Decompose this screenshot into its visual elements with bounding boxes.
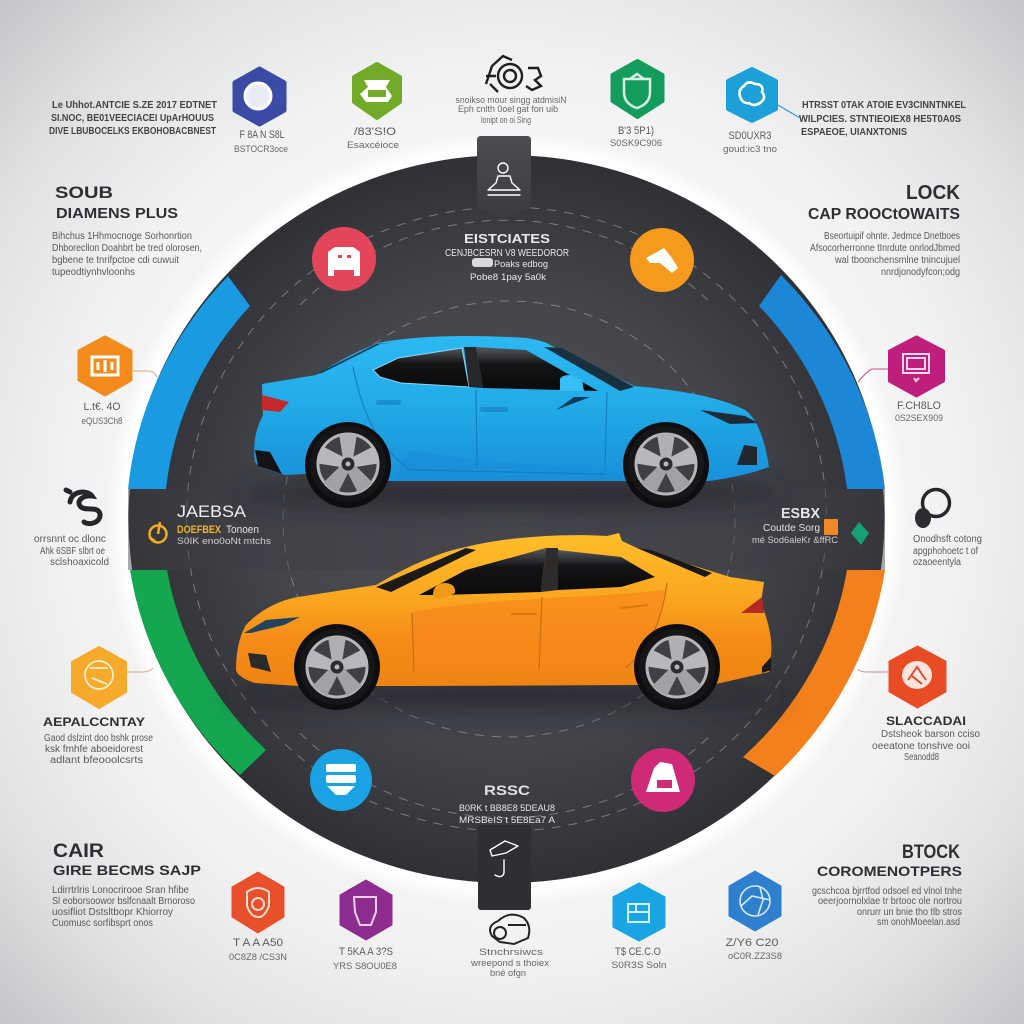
rear window — [373, 348, 469, 387]
text: Dstsheok barson cciso — [881, 729, 980, 740]
disc body — [128, 155, 884, 883]
disc right label: mé Sod6aleKr &ffRC — [752, 535, 838, 546]
centre top text: Poaks edbog — [494, 259, 548, 270]
top left text block: Le Uhhot.ANTCIE S.ZE 2017 EDTNET — [52, 100, 217, 111]
bottom right heading block: sm onohMoeelan.asd — [877, 917, 960, 928]
icon: luggage — [328, 247, 360, 276]
left middle text — [34, 534, 109, 568]
windshield strip — [544, 347, 634, 391]
car: blue — [254, 336, 769, 508]
icon: helmet — [245, 83, 271, 109]
caption: T$ CE.C.O — [615, 946, 661, 958]
caption: Z/Y6 C20 — [726, 937, 778, 949]
centre bottom text: B0RK t BB8E8 5DEAU8 — [459, 803, 555, 814]
black icon: left wave — [66, 490, 100, 524]
taillight — [262, 395, 289, 412]
icon: orange square — [824, 519, 838, 535]
caption: B'3 5P1) — [618, 125, 654, 137]
caption: SD0UXR3 — [728, 130, 772, 142]
caption: F.CH8LO — [897, 400, 941, 412]
rear wheel — [639, 629, 715, 705]
dashed orbit outer — [186, 207, 826, 831]
connector — [127, 668, 153, 672]
pillar — [541, 548, 558, 592]
top right text block: HTRSST 0TAK ATOIE EV3CINNTNKEL — [802, 100, 966, 111]
sub caption: YRS S8OU0E8 — [333, 961, 397, 972]
sub caption: S0SK9C906 — [610, 138, 662, 149]
top right text block — [799, 100, 966, 138]
icon: bottle — [354, 897, 376, 925]
top left text block — [49, 100, 217, 137]
hex: yellow left — [43, 647, 153, 766]
centre top text: Pobe8 1pay 5a0k — [470, 272, 546, 283]
right middle text: ozaoeentyla — [913, 557, 961, 568]
disc right label: ESBX — [781, 505, 820, 522]
circle badge: red — [312, 227, 376, 291]
hex: red right: Seanodd8 — [904, 752, 939, 763]
black icon: right ring — [915, 490, 950, 528]
bottom left heading block: Sl eoborsoowor bslfcnaalt Brnoroso — [52, 896, 195, 907]
hex: blue bottom — [726, 871, 782, 962]
hex: red right: oeeatone tonshve ooi — [872, 741, 970, 752]
bottom centre text: Stnchrsiwcs — [479, 947, 543, 958]
hex: orange left — [79, 337, 157, 427]
icon: wrench — [646, 248, 678, 273]
top tab — [477, 136, 531, 218]
mirror shadow — [556, 397, 590, 410]
windshield strip — [376, 548, 476, 592]
connector — [133, 371, 157, 377]
roof strip — [316, 342, 396, 374]
top centre text: Eph cnlth 0oel gat fon uib — [458, 104, 558, 115]
car shadows — [225, 474, 787, 712]
left heading block: DIAMENS PLUS — [56, 205, 178, 222]
front wheel — [628, 426, 704, 502]
bottom left heading block: Cuomusc sorfibsprt onos — [52, 918, 153, 929]
sub caption: eQUS3Ch8 — [82, 416, 122, 427]
heading: SLACCADAI — [886, 714, 966, 728]
hex: red bottom — [229, 872, 287, 963]
sub caption: Esaxcéioce — [347, 140, 399, 151]
bottom right heading block: oeerjoornolxlae tr brtooc ole nortrou — [818, 896, 962, 907]
arc segment: blue right — [759, 275, 885, 489]
bottom right heading block: gcschcoa bjrrtfod odsoel ed vlnol tnhe — [812, 886, 962, 897]
mirror — [433, 583, 455, 598]
icon: document — [628, 904, 649, 922]
mirror — [560, 375, 584, 391]
front window — [419, 548, 546, 595]
door lines — [412, 583, 667, 673]
right heading block: nnrdjonodyfcon;odg — [881, 267, 960, 278]
caption: T 5KA A 3?S — [339, 946, 393, 958]
icon: monitor — [903, 354, 929, 381]
circle badge: pink — [631, 748, 695, 812]
left heading block: Bihchus 1Hhmocnoge Sorhonrtion — [52, 231, 192, 242]
right middle text: Onodhsft cotong — [913, 534, 982, 545]
front window — [476, 347, 598, 391]
bottom left heading block: uosifliot Dstsltbopr Khiorroy — [52, 907, 173, 918]
sub caption: BSTOCR3oce — [234, 144, 288, 155]
headlight — [244, 617, 300, 633]
orange body — [236, 533, 771, 686]
text: Gaod dslzint doo bshk prose — [44, 733, 153, 744]
taillight — [741, 597, 764, 613]
dashed orbit inner — [283, 301, 735, 737]
sub caption: goud:ic3 tno — [723, 144, 777, 155]
centre top text — [445, 231, 569, 283]
top centre text: lonipt on oi Sing — [481, 115, 531, 126]
icon: head — [85, 661, 113, 689]
car: orange — [236, 533, 771, 710]
sub caption: oC0R.ZZ3S8 — [728, 951, 782, 962]
disc left label: S0IK eno0oNt mtchs — [177, 536, 271, 547]
icon: emblem — [92, 357, 118, 375]
icon: cloud — [740, 82, 764, 105]
bottom centre text — [470, 947, 549, 979]
connector — [858, 669, 889, 672]
disc right label: Coutde Sorg — [763, 522, 820, 534]
rear strip — [637, 548, 712, 577]
disc right label — [752, 505, 869, 546]
circle badge: cyan — [310, 749, 372, 811]
centre top text: CENJBCESRN V8 WEEDOROR — [445, 248, 569, 259]
sub caption: 0S2SEX909 — [895, 413, 943, 424]
dashed arc bottom — [300, 733, 713, 818]
icon: stacked server — [326, 764, 356, 795]
circle badge: orange — [630, 228, 694, 292]
hex: cyan — [723, 69, 800, 155]
right heading block: Bseortuipif ohnte. Jedmce Dnetboes — [824, 231, 960, 242]
icon: badge — [902, 661, 932, 689]
left heading block: Dhborecllon Doahbrt be tred olorosen, — [52, 243, 202, 254]
bottom right heading block — [812, 842, 962, 928]
bottom centre text: wreepond s thoiex — [470, 958, 549, 969]
left middle text: sclshoaxicold — [50, 557, 109, 568]
headlight — [700, 410, 758, 424]
centre top text: EISTCIATES — [464, 231, 550, 246]
door shading — [412, 590, 665, 672]
right heading block: CAP ROOCtOWAITS — [808, 206, 960, 223]
disc left label — [149, 502, 271, 547]
arc segment: orange — [743, 570, 885, 776]
left middle text: orrsnnt oc dlonc — [34, 534, 106, 545]
hex: red right — [858, 646, 980, 763]
caption: /83'S!O — [354, 126, 397, 138]
arc segment: blue left — [128, 276, 250, 489]
hex: indigo — [234, 68, 288, 155]
dashed arc top — [300, 220, 713, 305]
rear bumper — [255, 450, 282, 474]
top right text block: WILPCIES. STNTIEOIEX8 HE5T0A0S — [799, 114, 961, 125]
front wheel — [299, 629, 375, 705]
lower body shading — [395, 450, 625, 481]
icon: globe — [740, 886, 770, 916]
central disc — [114, 141, 898, 897]
right middle text — [913, 534, 982, 568]
bottom right heading block: BTOCK — [902, 842, 960, 863]
left heading block: tupeodtiynhvloonhs — [52, 267, 135, 278]
top right text block: ESPAEOE, UIANXTONIS — [801, 127, 907, 138]
right middle text: apgphohoetc t of — [913, 546, 978, 557]
top centre text — [456, 95, 567, 126]
connector — [858, 369, 888, 382]
pillar — [464, 347, 483, 388]
hex: lime — [347, 64, 400, 151]
disc halo — [114, 141, 898, 897]
bottom right heading block: onrurr un bnie tho tlb stros — [857, 907, 962, 918]
left heading block: bgbene te tnrifpctoe cdi cuwuit — [52, 255, 179, 266]
handles — [511, 605, 648, 614]
top centre text: snoikso mour singg atdmisiN — [456, 95, 567, 106]
bottom left heading block: CAIR — [53, 841, 104, 862]
bottom left heading block: Ldirrtrlris Lonocrirooe Sran hfibe — [52, 885, 189, 896]
disc left label: DOEFBEX — [177, 524, 222, 536]
handles — [376, 400, 508, 412]
heading: AEPALCCNTAY — [43, 715, 145, 729]
hex: purple — [333, 880, 397, 972]
right heading block — [808, 182, 961, 278]
bottom left heading block — [52, 841, 201, 929]
left middle text: Ahk 6SBF slbrt oe — [40, 546, 105, 557]
disc left label: Tonoen — [226, 524, 259, 536]
arc segment: green — [130, 570, 266, 775]
caption: F 8A N S8L — [240, 129, 284, 141]
icon: tab bottom — [490, 841, 518, 877]
wheel arches — [305, 422, 391, 508]
bottom tab — [478, 825, 531, 910]
centre bottom text — [459, 782, 556, 826]
front intake — [248, 653, 271, 672]
right heading block: LOCK — [906, 182, 961, 204]
bottom right heading block: COROMENOTPERS — [817, 863, 962, 879]
top left text block: DIVE LBUBOCELKS EKBOHOBACBNEST — [49, 126, 216, 137]
caption: T A A A50 — [233, 937, 283, 949]
icon: yellow badge — [149, 522, 166, 542]
icon: shield — [624, 74, 650, 108]
hex: magenta right — [858, 337, 944, 424]
top left text block: SI.NOC, BE01VEECIACEI UpArHOUUS — [51, 113, 214, 124]
sub caption: S0R3S Soln — [612, 960, 666, 971]
wheel arches — [294, 624, 380, 710]
sub caption: 0C8Z8 /CS3N — [229, 952, 287, 963]
left heading block: SOUB — [55, 183, 113, 202]
centre bottom text: MRSBeIS t 5E8Ea7 A — [459, 815, 556, 826]
caption: L.t€. 4O — [84, 401, 121, 413]
black icon: bottom helmet — [490, 915, 529, 944]
door lines — [353, 367, 607, 474]
blue body — [254, 336, 769, 481]
rear window — [558, 550, 655, 590]
icon: shield coil — [247, 888, 269, 917]
disc left label: JAEBSA — [177, 502, 247, 521]
right heading block: wal tboonchensmlne tnincujuel — [834, 255, 960, 266]
bottom centre text: bné ofgn — [490, 968, 526, 979]
centre bottom text: RSSC — [484, 782, 530, 798]
rear wheel — [310, 426, 386, 502]
rear bumper — [762, 657, 771, 673]
front intake — [737, 445, 757, 465]
icon: engine — [360, 80, 392, 102]
hex: yellow left: ksk fmhfe aboeidorest — [45, 744, 143, 755]
hex: green — [610, 61, 662, 149]
black icon: top engine — [486, 56, 541, 92]
icon: bag — [646, 762, 680, 792]
icon: green diamond — [851, 522, 869, 545]
side band — [128, 489, 885, 570]
right heading block: Afsocorherronne tInrdute onrlodJbmed — [810, 243, 960, 254]
hex: cyan bottom — [612, 883, 666, 971]
icon: tab top — [488, 163, 520, 195]
left heading block — [52, 183, 202, 278]
bottom left heading block: GIRE BECMS SAJP — [53, 862, 201, 878]
connector — [778, 105, 800, 118]
hex: yellow left: adlant bfeooolcsrts — [50, 755, 143, 766]
